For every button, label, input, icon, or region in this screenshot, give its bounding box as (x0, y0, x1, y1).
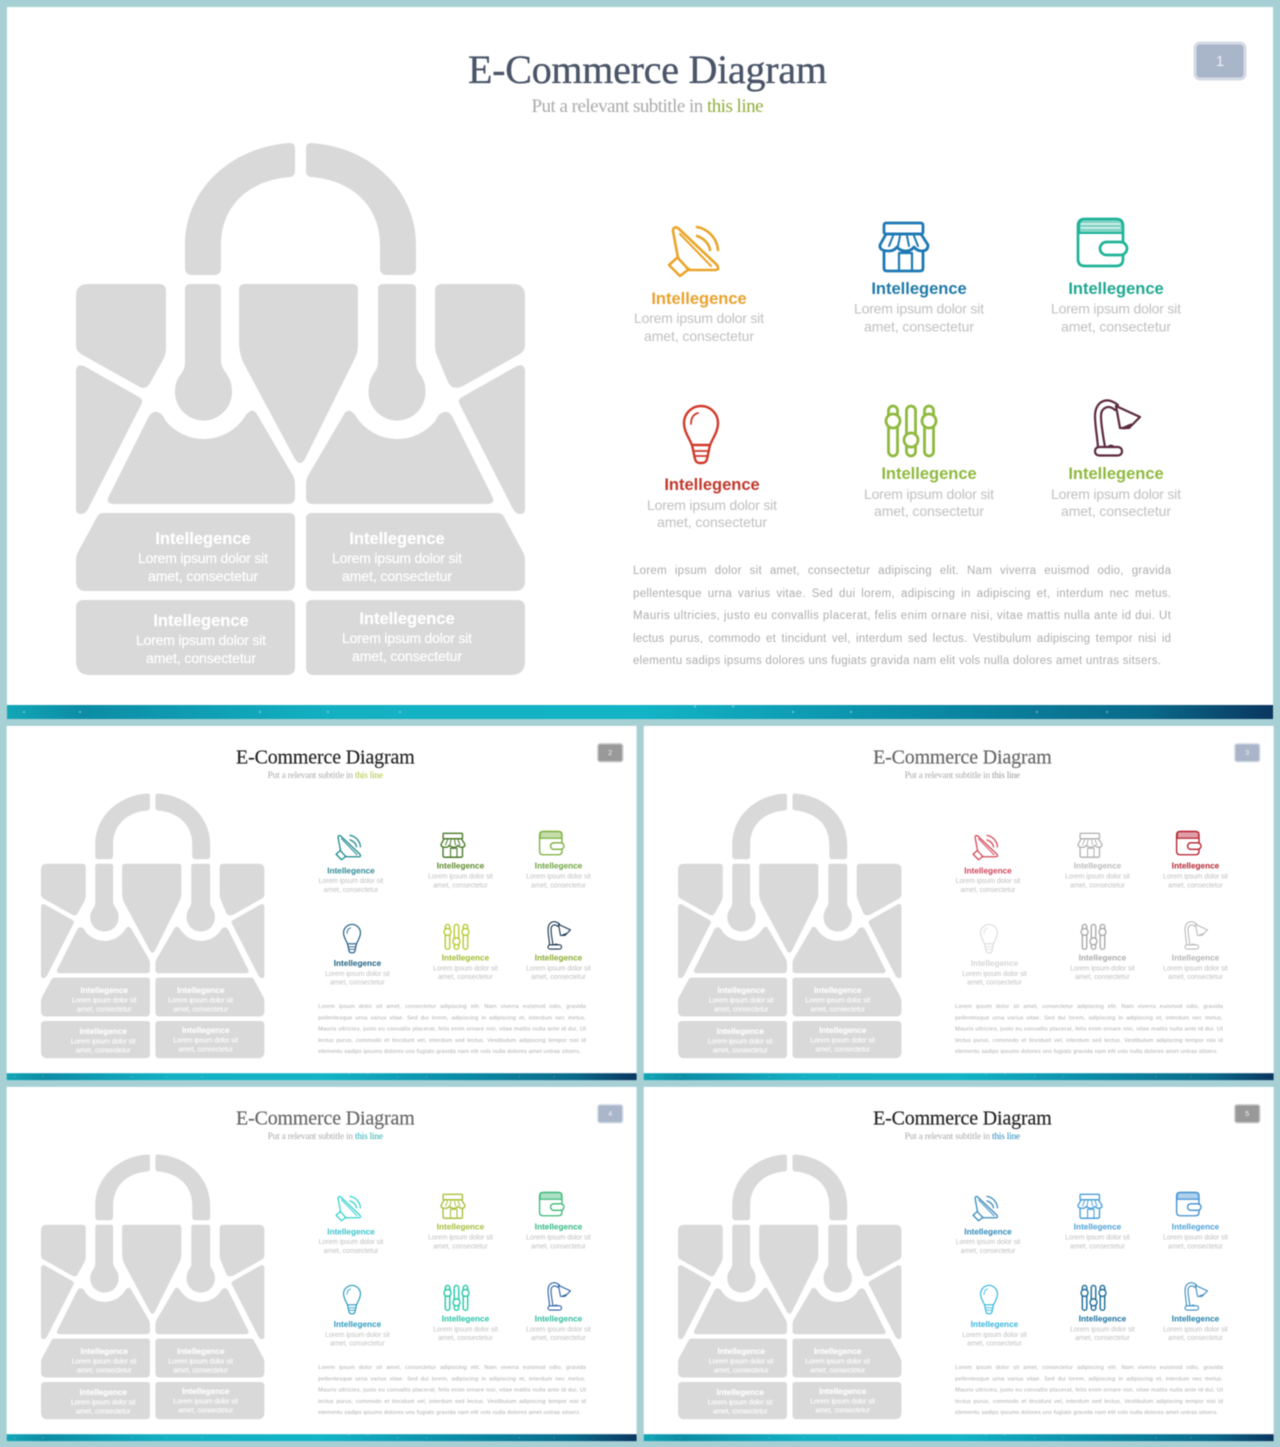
bag labels: amet, consectetur (77, 1007, 132, 1014)
item text: sliders: Intellegence (442, 954, 490, 963)
item text: sliders: amet, consectetur (1075, 1335, 1131, 1342)
bag label bottom right: amet, consectetur (352, 648, 462, 664)
bag labels: Intellegence (177, 1347, 225, 1356)
bag labels (708, 1347, 875, 1415)
bag labels: Lorem ipsum dolor sit (71, 1399, 136, 1406)
slide 5 gradient footer bar (644, 1434, 1274, 1441)
item text: wallet: Intellegence (1172, 862, 1220, 871)
item text: desk lamp: Intellegence (535, 1315, 583, 1324)
slide 4 shopping bag diagram (41, 1155, 264, 1419)
item text: shop (428, 1223, 493, 1250)
item text: shop: Intellegence (437, 1223, 485, 1232)
bag labels: Lorem ipsum dolor sit (173, 1037, 238, 1044)
item text: wallet (1051, 280, 1181, 334)
bag label bottom left: amet, consectetur (146, 650, 256, 666)
body paragraph: lectus purus, commodo et tincidunt vel, interdum sed lectus. Vestibulum adipiscing tempor nisi id (955, 1038, 1223, 1044)
item text: light bulb: amet, consectetur (330, 980, 386, 987)
bag labels (708, 986, 875, 1054)
item text: light bulb: Lorem ipsum dolor sit (962, 971, 1027, 978)
body paragraph: Lorem ipsum dolor sit amet, consectetur adipiscing elit. Nam viverra euismod odio, gravida (318, 1004, 587, 1010)
bag labels: Intellegence (80, 986, 128, 995)
item text: speaker: Intellegence (964, 867, 1012, 876)
bag label top left: Lorem ipsum dolor sit (138, 550, 268, 566)
slide 3 subtitle: Put a relevant subtitle in this line (905, 771, 1020, 781)
body paragraph: lectus purus, commodo et tincidunt vel, interdum sed lectus. Vestibulum adipiscing tempor nisi id (318, 1038, 586, 1044)
item text: light bulb: amet, consectetur (330, 1341, 386, 1348)
slide 2 title: E-Commerce Diagram (236, 747, 415, 769)
bag labels: Lorem ipsum dolor sit (810, 1398, 875, 1405)
item text: shop: amet, consectetur (433, 1243, 489, 1250)
slide 4 subtitle: Put a relevant subtitle in this line (268, 1132, 383, 1142)
item text: shop: Lorem ipsum dolor sit (428, 1234, 493, 1241)
bag label top left: amet, consectetur (148, 568, 258, 584)
item text: wallet: amet, consectetur (1168, 1243, 1224, 1250)
slide 1 subtitle: Put a relevant subtitle in this line (532, 96, 764, 117)
icon: speaker (669, 227, 718, 276)
item text: shop: amet, consectetur (1070, 882, 1126, 889)
body paragraph: lectus purus, commodo et tincidunt vel, interdum sed lectus. Vestibulum adipiscing tempor nisi id (318, 1399, 586, 1405)
icon: wallet (1177, 1192, 1201, 1216)
bag labels (71, 986, 238, 1054)
item text: wallet: Intellegence (535, 862, 583, 871)
item text: sliders: Intellegence (881, 465, 977, 483)
slide 4 title: E-Commerce Diagram (236, 1108, 415, 1130)
item text: desk lamp: amet, consectetur (1168, 1335, 1224, 1342)
item text: wallet: Intellegence (1068, 280, 1164, 298)
body paragraph: lectus purus, commodo et tincidunt vel, interdum sed lectus. Vestibulum adipiscing tempor nisi id (955, 1399, 1223, 1405)
item text: desk lamp: Lorem ipsum dolor sit (1051, 486, 1181, 502)
slide 4 page number badge: 4 (608, 1109, 612, 1118)
bag labels: amet, consectetur (815, 1046, 871, 1053)
item text: light bulb: amet, consectetur (967, 980, 1023, 987)
slide 5 page number badge (1235, 1105, 1260, 1123)
bag label bottom left (136, 612, 266, 666)
bag label bottom right: Lorem ipsum dolor sit (342, 630, 472, 646)
item text: sliders: amet, consectetur (438, 1335, 493, 1342)
item text: shop: Lorem ipsum dolor sit (1065, 873, 1130, 880)
bag labels: amet, consectetur (810, 1007, 866, 1014)
item text: desk lamp: Intellegence (1172, 954, 1220, 963)
item text: shop: Intellegence (1074, 862, 1122, 871)
panel: slide 2 (7, 726, 637, 1080)
item text: desk lamp (1163, 1315, 1228, 1342)
item text: light bulb: Intellegence (334, 1320, 382, 1329)
item text: light bulb: Intellegence (334, 959, 382, 968)
icon: desk lamp (1185, 1283, 1207, 1310)
bag labels: amet, consectetur (76, 1047, 131, 1054)
item text: speaker (319, 1228, 383, 1255)
slide 3 title: E-Commerce Diagram (873, 747, 1052, 769)
item text: shop (1065, 862, 1130, 889)
item text: wallet: amet, consectetur (531, 882, 587, 889)
item text: sliders (433, 1315, 498, 1342)
bag labels: Intellegence (717, 1027, 764, 1036)
slide 1 gradient footer bar (7, 705, 1273, 719)
bag label top right: Intellegence (349, 530, 445, 548)
icon: speaker (336, 1196, 361, 1221)
body paragraph: Lorem ipsum dolor sit amet, consectetur adipiscing elit. Nam viverra euismod odio, gravida (955, 1004, 1224, 1010)
icon: wallet (1078, 219, 1127, 266)
item text: light bulb (962, 959, 1027, 987)
item text: sliders: Intellegence (1079, 1315, 1127, 1324)
item text: wallet: amet, consectetur (1061, 318, 1171, 334)
item text: desk lamp: amet, consectetur (1061, 503, 1171, 519)
icon: light bulb (344, 924, 360, 953)
panel: slide 3 (644, 726, 1274, 1080)
bag labels: amet, consectetur (713, 1408, 768, 1415)
slide 2 page number badge (598, 744, 623, 762)
bag labels: Lorem ipsum dolor sit (810, 1037, 875, 1044)
panel: slide 5 (644, 1087, 1274, 1441)
slide 5 subtitle: Put a relevant subtitle in this line (905, 1132, 1020, 1142)
body paragraph (955, 1365, 1224, 1416)
item text: shop: Lorem ipsum dolor sit (428, 873, 493, 880)
body paragraph: pellentesque urna varius vitae. Sed dui lorem, adipiscing in adipiscing et, interdum nec metus. (318, 1015, 586, 1021)
item text: desk lamp: Lorem ipsum dolor sit (1163, 1327, 1228, 1334)
icon: speaker (336, 835, 361, 860)
body paragraph: Mauris ultricies, justo eu convallis placerat, felis enim ornare nisi, vitae mattis nulla ante id dui. Ut (318, 1026, 586, 1032)
item text: speaker: Lorem ipsum dolor sit (319, 878, 383, 885)
item text: light bulb (325, 959, 390, 987)
item text: wallet (526, 862, 591, 889)
bag labels: Intellegence (718, 1347, 765, 1356)
item text: light bulb: Intellegence (971, 959, 1019, 968)
bag labels: amet, consectetur (815, 1407, 871, 1414)
slide 5 title: E-Commerce Diagram (873, 1108, 1052, 1130)
item text: sliders: amet, consectetur (1075, 974, 1131, 981)
icon: wallet (540, 831, 564, 855)
item text: wallet: Lorem ipsum dolor sit (1163, 1234, 1228, 1241)
bag labels: Intellegence (814, 986, 862, 995)
item text: shop: amet, consectetur (864, 318, 974, 334)
item text: speaker: Intellegence (964, 1228, 1012, 1237)
bag labels: Lorem ipsum dolor sit (168, 1359, 233, 1366)
icon: shop (880, 223, 928, 271)
item text: speaker: amet, consectetur (961, 1248, 1016, 1255)
bag label top left (138, 530, 268, 584)
item text: speaker: amet, consectetur (324, 1248, 379, 1255)
icon: desk lamp (1185, 922, 1207, 949)
item text: sliders: amet, consectetur (438, 974, 493, 981)
bag labels: Intellegence (182, 1026, 230, 1035)
body paragraph (318, 1365, 587, 1416)
item text: wallet (526, 1223, 591, 1250)
body paragraph: elementu sadips ipsums dolores uns fugiats gravida nam elit vols nulla dolores amet untras sitsers. (318, 1049, 581, 1055)
bag labels: Intellegence (182, 1387, 230, 1396)
item text: wallet: Intellegence (1172, 1223, 1220, 1232)
body paragraph (955, 1004, 1224, 1055)
icon: wallet (540, 1192, 564, 1216)
bag labels: amet, consectetur (810, 1368, 866, 1375)
body paragraph: pellentesque urna varius vitae. Sed dui lorem, adipiscing in adipiscing et, interdum nec metus. (955, 1376, 1223, 1382)
item text: sliders (1070, 954, 1135, 981)
bag labels: Intellegence (814, 1347, 862, 1356)
icon: sliders (886, 406, 936, 456)
item text: light bulb (647, 476, 777, 530)
item text: shop (1065, 1223, 1130, 1250)
bag labels: Intellegence (79, 1388, 127, 1397)
body paragraph (633, 565, 1172, 667)
item text: shop: Intellegence (1074, 1223, 1122, 1232)
bag labels: Lorem ipsum dolor sit (805, 998, 870, 1005)
bag labels: amet, consectetur (714, 1007, 769, 1014)
item text: shop: amet, consectetur (1070, 1243, 1126, 1250)
item text: speaker (319, 867, 383, 894)
slide 1 background (7, 7, 1273, 719)
item text: speaker: amet, consectetur (961, 887, 1016, 894)
item text: sliders: Lorem ipsum dolor sit (433, 1327, 498, 1334)
item text: shop (428, 862, 493, 889)
slide 3 shopping bag diagram (678, 794, 901, 1058)
slide 3 page number badge: 3 (1245, 748, 1249, 757)
slide 4 page number badge (598, 1105, 623, 1123)
slide 5 shopping bag diagram (678, 1155, 901, 1419)
bag labels: Lorem ipsum dolor sit (708, 1038, 773, 1045)
item text: sliders: amet, consectetur (874, 503, 984, 519)
slide 4 background (7, 1087, 637, 1441)
slide 1 page number badge: 1 (1216, 53, 1224, 70)
item text: desk lamp: amet, consectetur (1168, 974, 1224, 981)
item text: shop: amet, consectetur (433, 882, 489, 889)
body paragraph: Mauris ultricies, justo eu convallis placerat, felis enim ornare nisi, vitae mattis nulla ante id dui. Ut (955, 1026, 1223, 1032)
body paragraph: elementu sadips ipsums dolores uns fugiats gravida nam elit vols nulla dolores amet untras sitsers. (955, 1410, 1218, 1416)
item text: desk lamp: Lorem ipsum dolor sit (526, 966, 591, 973)
slide 3 page number badge (1235, 744, 1260, 762)
bag labels: Lorem ipsum dolor sit (709, 1359, 774, 1366)
body paragraph: Mauris ultricies, justo eu convallis placerat, felis enim ornare nisi, vitae mattis nulla ante id dui. Ut (633, 610, 1172, 622)
item text: shop: Intellegence (437, 862, 485, 871)
slide 2 shopping bag diagram (41, 794, 264, 1058)
body paragraph: elementu sadips ipsums dolores uns fugiats gravida nam elit vols nulla dolores amet untras sitsers. (633, 655, 1161, 667)
icon: sliders (444, 1285, 469, 1310)
bag labels: Intellegence (819, 1387, 867, 1396)
item text: wallet (1163, 1223, 1228, 1250)
item text: wallet: amet, consectetur (531, 1243, 587, 1250)
bag labels: Lorem ipsum dolor sit (805, 1359, 870, 1366)
item text: speaker: amet, consectetur (324, 887, 379, 894)
bag labels: amet, consectetur (178, 1046, 234, 1053)
body paragraph: elementu sadips ipsums dolores uns fugiats gravida nam elit vols nulla dolores amet untras sitsers. (955, 1049, 1218, 1055)
item text: light bulb: Lorem ipsum dolor sit (325, 971, 390, 978)
item text: light bulb: Intellegence (664, 476, 760, 494)
item text: wallet: amet, consectetur (1168, 882, 1224, 889)
slide 2 gradient footer bar (7, 1073, 637, 1080)
icon: speaker (973, 835, 998, 860)
item text: speaker: Intellegence (327, 867, 375, 876)
item text: light bulb: amet, consectetur (967, 1341, 1023, 1348)
bag labels: Lorem ipsum dolor sit (72, 998, 137, 1005)
item text: light bulb: Lorem ipsum dolor sit (325, 1332, 390, 1339)
body paragraph: pellentesque urna varius vitae. Sed dui lorem, adipiscing in adipiscing et, interdum nec metus. (633, 588, 1171, 600)
item text: wallet: Lorem ipsum dolor sit (1051, 300, 1181, 316)
item text: shop (854, 280, 984, 334)
item text: speaker: amet, consectetur (644, 328, 754, 344)
slide 1 shopping bag diagram (76, 143, 525, 675)
slide 5 background (644, 1087, 1274, 1441)
bag label top right: Lorem ipsum dolor sit (332, 550, 462, 566)
item text: desk lamp: amet, consectetur (531, 1335, 587, 1342)
slide 1 title: E-Commerce Diagram (468, 47, 827, 92)
slide 2 subtitle: Put a relevant subtitle in this line (268, 771, 383, 781)
bag label top right: amet, consectetur (342, 568, 452, 584)
item text: light bulb: amet, consectetur (657, 514, 767, 530)
icon: light bulb (684, 406, 718, 463)
bag labels (71, 1347, 238, 1415)
bag labels: amet, consectetur (77, 1368, 132, 1375)
item text: speaker: Lorem ipsum dolor sit (956, 878, 1020, 885)
bag labels: amet, consectetur (173, 1368, 229, 1375)
item text: sliders: Lorem ipsum dolor sit (864, 486, 994, 502)
slide 5 page number badge: 5 (1245, 1109, 1249, 1118)
item text: speaker (634, 290, 764, 344)
item text: speaker (956, 867, 1020, 894)
item text: sliders (1070, 1315, 1135, 1342)
body paragraph: pellentesque urna varius vitae. Sed dui lorem, adipiscing in adipiscing et, interdum nec metus. (318, 1376, 586, 1382)
item text: wallet: Lorem ipsum dolor sit (1163, 873, 1228, 880)
item text: speaker: Lorem ipsum dolor sit (634, 310, 764, 326)
item text: sliders (433, 954, 498, 981)
body paragraph: Lorem ipsum dolor sit amet, consectetur adipiscing elit. Nam viverra euismod odio, gravida (633, 565, 1172, 577)
item text: sliders: Lorem ipsum dolor sit (1070, 1327, 1135, 1334)
item text: light bulb: Lorem ipsum dolor sit (962, 1332, 1027, 1339)
bag labels: amet, consectetur (173, 1007, 229, 1014)
slide 2 page number badge: 2 (608, 748, 612, 757)
item text: desk lamp (1051, 465, 1181, 519)
bag label top right (332, 530, 462, 584)
icon: light bulb (344, 1285, 360, 1314)
bag labels: Intellegence (718, 986, 765, 995)
item text: shop: Lorem ipsum dolor sit (854, 300, 984, 316)
body paragraph: Lorem ipsum dolor sit amet, consectetur adipiscing elit. Nam viverra euismod odio, gravida (318, 1365, 587, 1371)
icon: desk lamp (1095, 401, 1140, 456)
slide 3 gradient footer bar (644, 1073, 1274, 1080)
icon: light bulb (981, 924, 997, 953)
panel: slide 4 (7, 1087, 637, 1441)
bag labels: Intellegence (819, 1026, 867, 1035)
item text: desk lamp: Intellegence (1172, 1315, 1220, 1324)
item text: sliders (864, 465, 994, 519)
item text: wallet: Intellegence (535, 1223, 583, 1232)
icon: sliders (1081, 924, 1106, 949)
icon: sliders (1081, 1285, 1106, 1310)
item text: light bulb: Lorem ipsum dolor sit (647, 497, 777, 513)
item text: light bulb (325, 1320, 390, 1348)
bag labels: Intellegence (80, 1347, 128, 1356)
item text: desk lamp: Lorem ipsum dolor sit (526, 1327, 591, 1334)
bag labels: Intellegence (79, 1027, 127, 1036)
bag labels: amet, consectetur (76, 1408, 131, 1415)
icon: sliders (444, 924, 469, 949)
icon: shop (441, 1194, 465, 1218)
item text: speaker: Lorem ipsum dolor sit (956, 1239, 1020, 1246)
slide 4 gradient footer bar (7, 1434, 637, 1441)
item text: speaker: Intellegence (327, 1228, 375, 1237)
item text: speaker: Intellegence (651, 290, 747, 308)
icon: shop (441, 833, 465, 857)
item text: desk lamp (1163, 954, 1228, 981)
icon: speaker (973, 1196, 998, 1221)
item text: wallet: Lorem ipsum dolor sit (526, 1234, 591, 1241)
item text: light bulb (962, 1320, 1027, 1348)
item text: sliders: Lorem ipsum dolor sit (433, 966, 498, 973)
icon: desk lamp (548, 1283, 570, 1310)
bag label bottom right: Intellegence (359, 610, 455, 628)
bag labels: Lorem ipsum dolor sit (173, 1398, 238, 1405)
icon: shop (1078, 833, 1102, 857)
bag labels: Lorem ipsum dolor sit (72, 1359, 137, 1366)
slide 3 background (644, 726, 1274, 1080)
item text: desk lamp: Intellegence (535, 954, 583, 963)
icon: desk lamp (548, 922, 570, 949)
bag label bottom left: Intellegence (153, 612, 249, 630)
bag labels: Intellegence (177, 986, 225, 995)
body paragraph: Lorem ipsum dolor sit amet, consectetur adipiscing elit. Nam viverra euismod odio, gravida (955, 1365, 1224, 1371)
item text: light bulb: Intellegence (971, 1320, 1019, 1329)
slide 1 page number badge (1195, 43, 1245, 79)
bag labels: Lorem ipsum dolor sit (708, 1399, 773, 1406)
bag label top left: Intellegence (155, 530, 251, 548)
item text: wallet: Lorem ipsum dolor sit (526, 873, 591, 880)
item text: shop: Lorem ipsum dolor sit (1065, 1234, 1130, 1241)
item text: desk lamp: Lorem ipsum dolor sit (1163, 966, 1228, 973)
item text: sliders: Lorem ipsum dolor sit (1070, 966, 1135, 973)
body paragraph: pellentesque urna varius vitae. Sed dui lorem, adipiscing in adipiscing et, interdum nec metus. (955, 1015, 1223, 1021)
body paragraph: lectus purus, commodo et tincidunt vel, interdum sed lectus. Vestibulum adipiscing tempor nisi id (633, 633, 1171, 645)
bag labels: Intellegence (717, 1388, 764, 1397)
item text: desk lamp: Intellegence (1068, 465, 1164, 483)
body paragraph: Mauris ultricies, justo eu convallis placerat, felis enim ornare nisi, vitae mattis nulla ante id dui. Ut (955, 1387, 1223, 1393)
item text: sliders: Intellegence (442, 1315, 490, 1324)
bag label bottom right (342, 610, 472, 664)
body paragraph: elementu sadips ipsums dolores uns fugiats gravida nam elit vols nulla dolores amet untras sitsers. (318, 1410, 581, 1416)
bag labels: Lorem ipsum dolor sit (168, 998, 233, 1005)
icon: wallet (1177, 831, 1201, 855)
panel: slide 1 (large) (7, 7, 1273, 719)
item text: wallet (1163, 862, 1228, 889)
bag label bottom left: Lorem ipsum dolor sit (136, 632, 266, 648)
icon: shop (1078, 1194, 1102, 1218)
item text: desk lamp (526, 954, 591, 981)
bag labels: Lorem ipsum dolor sit (709, 998, 774, 1005)
item text: speaker: Lorem ipsum dolor sit (319, 1239, 383, 1246)
bag labels: amet, consectetur (714, 1368, 769, 1375)
bag labels: amet, consectetur (178, 1407, 234, 1414)
item text: desk lamp: amet, consectetur (531, 974, 587, 981)
item text: shop: Intellegence (871, 280, 967, 298)
bag labels: amet, consectetur (713, 1047, 768, 1054)
slide 2 background (7, 726, 637, 1080)
item text: speaker (956, 1228, 1020, 1255)
body paragraph: Mauris ultricies, justo eu convallis placerat, felis enim ornare nisi, vitae mattis nulla ante id dui. Ut (318, 1387, 586, 1393)
icon: light bulb (981, 1285, 997, 1314)
item text: desk lamp (526, 1315, 591, 1342)
body paragraph (318, 1004, 587, 1055)
bag labels: Lorem ipsum dolor sit (71, 1038, 136, 1045)
item text: sliders: Intellegence (1079, 954, 1127, 963)
